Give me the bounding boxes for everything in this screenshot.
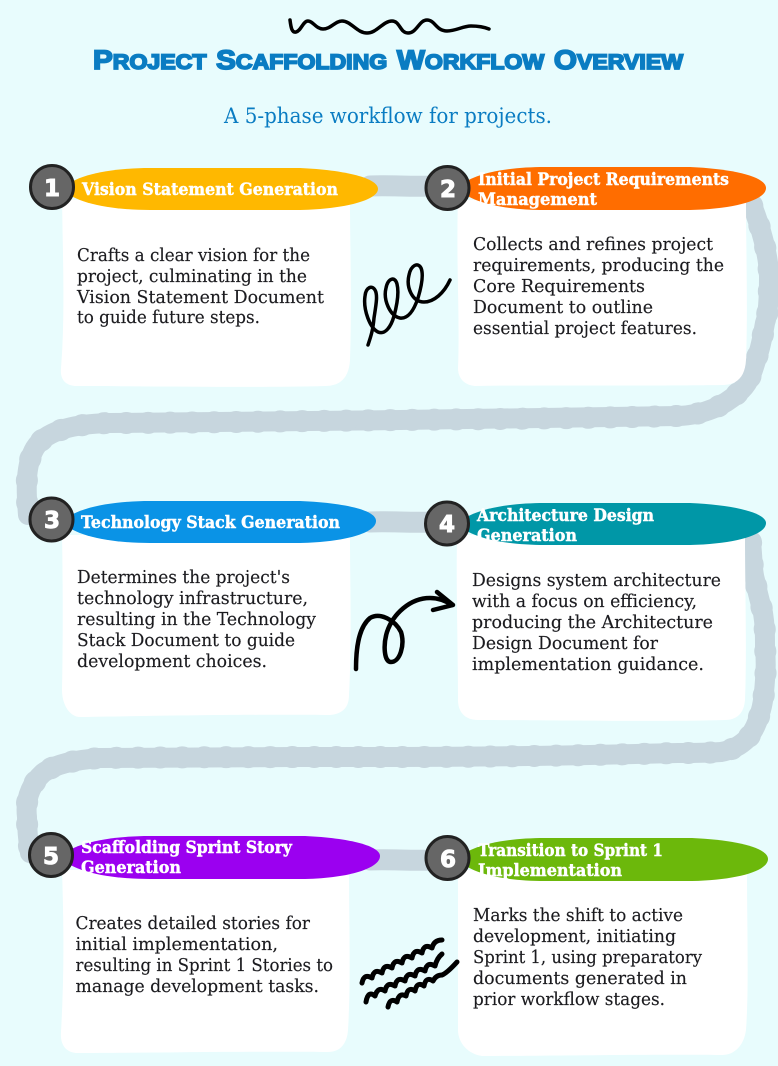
subtitle: A 5-phase workflow for projects. <box>223 104 552 128</box>
body text 6: prior workflow stages. <box>473 989 665 1010</box>
body text 5: resulting in Sprint 1 Stories to <box>76 955 333 976</box>
panel: step 3 technology stack <box>30 498 376 717</box>
icon: looping arrow <box>356 592 453 669</box>
body text 6: documents generated in <box>473 968 687 989</box>
body text 2: Collects and refines project <box>473 234 714 255</box>
heading 2 <box>478 170 729 210</box>
body text 6: Marks the shift to active <box>473 905 683 926</box>
heading 1: Vision Statement Generation <box>81 180 338 200</box>
card 5 <box>61 870 350 1053</box>
heading 4: Architecture Design <box>476 506 654 526</box>
body text 3: development choices. <box>77 651 267 672</box>
body text 4: producing the Architecture <box>472 612 713 633</box>
card 6 <box>458 870 748 1056</box>
body text 1 <box>76 245 325 328</box>
panel: step 4 architecture design <box>426 502 766 721</box>
heading 3: Technology Stack Generation <box>81 513 340 533</box>
body text 6: Sprint 1, using preparatory <box>473 947 703 968</box>
body text 1: Crafts a clear vision for the <box>77 245 310 266</box>
banner 2 <box>458 167 766 210</box>
banner 1 <box>62 168 378 210</box>
number badge 4 <box>426 502 468 545</box>
body text 4: implementation guidance. <box>472 654 704 675</box>
banner 3 <box>62 501 376 543</box>
number badge 2 <box>426 166 469 210</box>
body text 2: Document to outline <box>473 297 653 318</box>
body text 1: to guide future steps. <box>77 307 260 328</box>
body text 2 <box>473 234 724 339</box>
card 2 <box>457 200 747 386</box>
heading 2: Management <box>478 190 597 210</box>
number badge 3 <box>30 498 73 541</box>
heading 5 <box>81 838 293 878</box>
heading 4: Generation <box>477 526 577 546</box>
body text 2: Core Requirements <box>473 276 645 297</box>
body text 1: Vision Statement Document <box>76 287 325 308</box>
body text 3: Stack Document to guide <box>77 630 295 651</box>
heading 6: Transition to Sprint 1 <box>478 841 663 861</box>
number badge 6 <box>426 836 469 880</box>
icon: decorative squiggle above title <box>290 20 489 33</box>
body text 2: requirements, producing the <box>473 255 724 276</box>
icon: three wavy scribbles <box>362 940 457 1007</box>
body text 3: Determines the project's <box>77 567 290 588</box>
card 3 <box>62 535 351 717</box>
heading 4 <box>476 506 654 546</box>
body text 2: essential project features. <box>473 318 697 339</box>
heading 6 <box>478 841 663 881</box>
banner 4 <box>458 503 766 545</box>
workflow connector path <box>27 186 769 860</box>
panel: step 1 vision statement <box>30 166 378 387</box>
number badge 5: 5 <box>43 844 59 870</box>
panel: step 6 transition to sprint 1 <box>426 836 768 1056</box>
number badge 3: 3 <box>44 508 60 534</box>
body text 1: project, culminating in the <box>77 266 307 287</box>
number badge 1 <box>30 166 74 208</box>
number badge 4: 4 <box>439 512 455 538</box>
card 1 <box>61 200 351 387</box>
heading 5: Generation <box>81 858 181 878</box>
body text 6: development, initiating <box>473 926 676 947</box>
body text 4: with a focus on efficiency, <box>472 591 697 612</box>
body text 4: Design Document for <box>472 633 658 654</box>
body text 3: resulting in the Technology <box>77 609 317 630</box>
banner 6 <box>458 838 768 881</box>
number badge 2: 2 <box>440 177 456 203</box>
body text 5: initial implementation, <box>76 934 278 955</box>
card 4 <box>457 535 746 721</box>
body text 5 <box>76 913 333 997</box>
number badge 6: 6 <box>440 847 456 873</box>
panel: step 5 sprint stories <box>30 834 380 1053</box>
body text 3 <box>77 567 317 672</box>
panel: step 2 requirements <box>426 166 766 386</box>
banner 5 <box>60 836 380 879</box>
heading 2: Initial Project Requirements <box>478 170 729 190</box>
body text 3: technology infrastructure, <box>77 588 308 609</box>
number badge 5 <box>30 834 72 876</box>
heading 6: Implementation <box>478 861 622 881</box>
icon: cursive loops <box>365 265 450 345</box>
body text 4 <box>472 570 721 675</box>
body text 5: Creates detailed stories for <box>76 913 310 934</box>
body text 5: manage development tasks. <box>76 976 319 997</box>
body text 4: Designs system architecture <box>472 570 721 591</box>
heading 5: Scaffolding Sprint Story <box>81 838 293 858</box>
number badge 1: 1 <box>44 176 60 202</box>
title: PROJECT SCAFFOLDING WORKFLOW OVERVIEW <box>93 45 683 75</box>
body text 6 <box>473 905 703 1010</box>
